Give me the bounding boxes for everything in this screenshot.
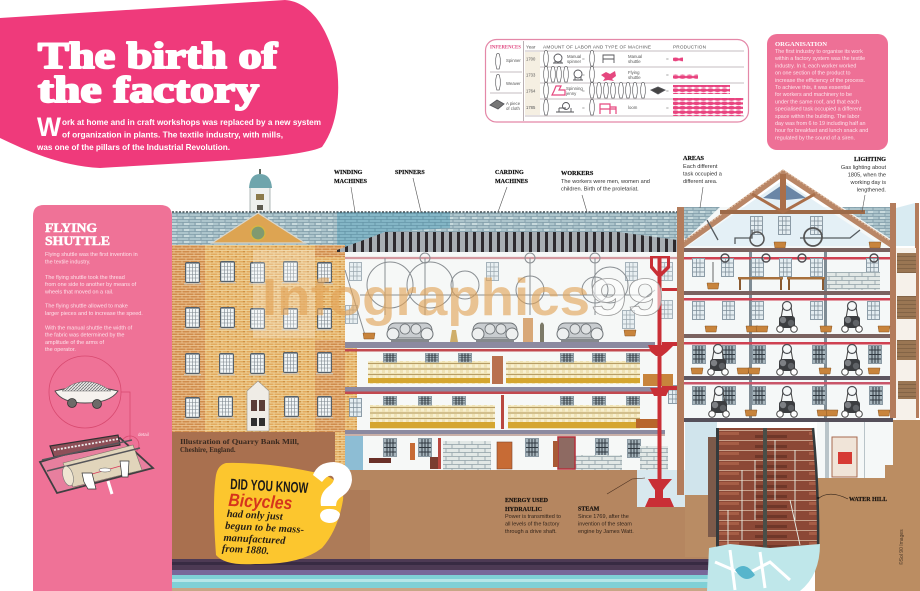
title: The birth of: [38, 36, 278, 77]
header blob: [0, 0, 338, 168]
spinning rows: [368, 356, 640, 429]
right wing: [677, 170, 919, 591]
organisation text: for workers and machinery to be: [775, 92, 852, 98]
label: lighting: lengthened.: [857, 188, 886, 194]
icons: workers: [496, 50, 645, 115]
roof: [172, 212, 345, 245]
organisation text: increase the efficiency of the process.: [775, 78, 865, 84]
icons: machines: [490, 54, 665, 112]
table headings: shuttle: [628, 75, 641, 80]
label: energy used hydraulic: through a drive shaft.: [505, 529, 557, 535]
organisation text: regulated by the sound of a siren.: [775, 135, 855, 141]
label: steam: STEAM: [578, 506, 600, 512]
label: areas: different area.: [683, 179, 718, 185]
upper floor windows: [345, 262, 673, 329]
flying shuttle text: The flying shuttle allowed to make: [45, 304, 128, 310]
roof slate: [678, 207, 720, 240]
label: water hill: WATER HILL: [849, 497, 887, 503]
organisation text: specialised task occupied a different: [775, 107, 862, 113]
label: areas: task occupied a: [683, 172, 723, 178]
title: the factory: [38, 70, 260, 111]
table headings: shuttle: [628, 59, 641, 64]
table headings: =: [582, 88, 585, 94]
callout text: begun to be mass-: [225, 521, 305, 536]
label: winding machines: WINDING: [334, 170, 363, 176]
table headings: =: [582, 56, 585, 62]
flying shuttle heading: [45, 220, 110, 248]
rafters: [337, 232, 677, 252]
intro text: of organization in plants. The textile industry, with mills,: [62, 130, 283, 140]
table headings: loom: [628, 105, 638, 110]
icon: shuttle detail: [49, 356, 149, 454]
flying shuttle heading: SHUTTLE: [45, 233, 110, 248]
label: spinners: SPINNERS: [395, 170, 425, 176]
left brick block: [172, 169, 367, 470]
table headings: jenny: [565, 91, 577, 96]
label: carding machines: CARDING: [495, 170, 524, 176]
label: workers: WORKERS: [561, 170, 594, 177]
table headings: Spinning: [566, 86, 583, 91]
icon: flying shuttle loom: [40, 435, 153, 494]
water wheel: [708, 428, 819, 553]
label: lighting: working day is: [850, 180, 886, 186]
watermark numerals: 99: [590, 269, 664, 327]
label: workers: children. Birth of the proletariat.: [561, 186, 639, 192]
carding machines: [363, 318, 636, 342]
roof: [345, 212, 678, 250]
label: energy used hydraulic: ENERGY USED: [505, 498, 549, 504]
organisation text: on one section of the product to: [775, 71, 851, 77]
label: carding machines: [495, 170, 529, 212]
references table: [486, 40, 748, 122]
posts and shaft pipes: [677, 203, 919, 495]
table headings: 1785: [526, 105, 536, 110]
label: workers: [561, 170, 650, 212]
table headings: PRODUCTION: [673, 44, 706, 50]
label: areas: AREAS: [683, 155, 705, 162]
label: lighting: [841, 156, 886, 212]
flying shuttle text: the fabric was determined by the: [45, 332, 124, 338]
central mill hall: [172, 212, 681, 470]
flying shuttle text: from one side to another by means of: [45, 282, 137, 288]
table headings: Flying: [628, 70, 640, 75]
river: [172, 559, 712, 591]
label: winding machines: [334, 170, 368, 212]
red drive shaft: [645, 256, 680, 507]
label: areas: Each different: [683, 164, 718, 170]
label: lighting: 1805, when the: [848, 172, 886, 178]
organisation text: industry. In it, each worker worked: [775, 63, 856, 69]
label: carding machines: MACHINES: [495, 179, 529, 185]
icons: pink machines: [552, 71, 616, 114]
label: energy used hydraulic: HYDRAULIC: [505, 507, 542, 513]
label: steam: Since 1769, after the: [578, 514, 629, 520]
intro text: [36, 112, 321, 152]
panel: flying shuttle: [33, 205, 172, 591]
right wing windows: [692, 258, 883, 405]
label: lighting: LIGHTING: [854, 156, 886, 163]
pediment: [212, 213, 305, 243]
waterfall: [707, 544, 820, 591]
table headings: Manual: [628, 54, 642, 59]
basement room: [685, 422, 893, 495]
floors: [684, 248, 893, 422]
table headings: 1733: [526, 72, 536, 78]
illustration: quarry bank mill: [172, 155, 920, 591]
roof eave: [172, 211, 678, 213]
organisation text: [774, 49, 868, 141]
caption: [180, 439, 299, 454]
label: steam: engine by James Watt.: [578, 529, 634, 535]
watermark: Infographics: [262, 269, 590, 327]
label: winding machines: MACHINES: [334, 179, 368, 185]
icon: shuttle detail: detail: [138, 432, 149, 437]
table headings: =: [666, 88, 669, 94]
table headings: INFERENCES: [490, 46, 521, 50]
label: lighting: Gas lighting about: [841, 165, 886, 171]
intro text: W: [37, 112, 61, 142]
flying shuttle text: amplitude of the arms of: [45, 340, 104, 346]
pulleys: [721, 254, 878, 262]
organisation text: hour for breakfast and lunch snack and: [775, 128, 868, 134]
brick windows: [184, 261, 333, 419]
flying shuttle heading: FLYING: [45, 220, 97, 235]
label: energy used hydraulic: Power is transmitted to: [505, 514, 561, 520]
shutters: [897, 253, 916, 399]
caption: Cheshire, England.: [180, 447, 236, 454]
floor beams: [345, 342, 665, 436]
pump pit: [637, 470, 685, 507]
table headings: [490, 44, 706, 111]
intro text: ork at home and in craft workshops was replaced by a new system: [62, 117, 321, 127]
callout text: from 1880.: [222, 544, 269, 557]
label: energy used hydraulic: all levels of the factory: [505, 522, 560, 528]
label: steam: [578, 506, 634, 535]
table headings: =: [582, 105, 585, 110]
table headings: =: [582, 72, 585, 78]
callout: did you know: [214, 462, 352, 564]
organisation text: space within the building. The labor: [775, 114, 860, 120]
flying shuttle text: wheels that moved on a rail.: [44, 290, 114, 296]
table headings: 1764: [526, 88, 536, 94]
intro text: was one of the pillars of the Industrial Revolution.: [36, 142, 230, 152]
callout text: DID YOU KNOW: [230, 476, 309, 497]
caption: Illustration of Quarry Bank Mill,: [180, 439, 299, 446]
callout text: Bicycles: [228, 490, 293, 513]
flying shuttle text: larger pieces and to increase the speed.: [45, 311, 143, 317]
spinning machines: [708, 302, 862, 417]
flying shuttle text: [44, 252, 143, 353]
table headings: 1700: [526, 56, 536, 62]
label: workers: The workers were men, women and: [561, 179, 650, 185]
ground floor: [369, 437, 668, 470]
attic: [707, 216, 881, 248]
flying shuttle text: the operator.: [45, 347, 76, 353]
callout text: had only just: [226, 509, 284, 523]
flying shuttle text: the textile industry.: [45, 260, 91, 266]
table headings: Weaver: [506, 81, 521, 86]
organisation text: day was from 6 to 19 including half an: [775, 121, 866, 127]
label: energy used hydraulic: [505, 478, 645, 535]
table headings: Manual: [567, 54, 581, 59]
title: [38, 36, 278, 111]
table headings: Year: [526, 44, 536, 50]
callout text: manufactured: [223, 533, 286, 547]
callout text: [222, 476, 309, 559]
front door: [247, 381, 269, 431]
table headings: of cloth: [506, 106, 520, 111]
organisation text: within a factory system was the textile: [774, 56, 865, 62]
label: spinners: [395, 170, 425, 212]
credit: ©Sol 90 Images: [898, 529, 905, 565]
organisation text: To achieve this, it was essential: [775, 85, 850, 91]
flying shuttle text: The flying shuttle took the thread: [45, 275, 125, 281]
flying shuttle text: With the manual shuttle the width of: [45, 326, 133, 332]
wheels and belts: [345, 253, 655, 335]
label: areas: [683, 155, 723, 208]
table headings: Spinner: [506, 58, 521, 63]
earth ground: [172, 420, 920, 591]
mid floor windows: [349, 353, 681, 428]
organisation text: under the same roof, and that each: [775, 99, 859, 105]
furniture and bales: [691, 262, 890, 416]
table headings: spinner: [567, 59, 582, 64]
flying shuttle text: Flying shuttle was the first invention in: [45, 252, 138, 258]
gable: [680, 170, 892, 247]
cupola: [249, 169, 272, 213]
table headings: =: [666, 105, 669, 110]
label: water hill: [819, 494, 887, 503]
table headings: =: [666, 72, 669, 78]
table headings: AMOUNT OF LABOR AND TYPE OF MACHINE: [543, 44, 651, 50]
label: steam: invention of the steam: [578, 522, 632, 528]
table headings: =: [666, 56, 669, 62]
brick annex below block: [335, 432, 353, 470]
panel: organisation: ORGANISATION: [775, 41, 827, 48]
production bars: [673, 57, 743, 116]
table headings: A piece: [506, 101, 521, 106]
panel: organisation: [767, 34, 888, 150]
question mark: [313, 462, 352, 523]
organisation text: The first industry to organise its work: [775, 49, 863, 55]
